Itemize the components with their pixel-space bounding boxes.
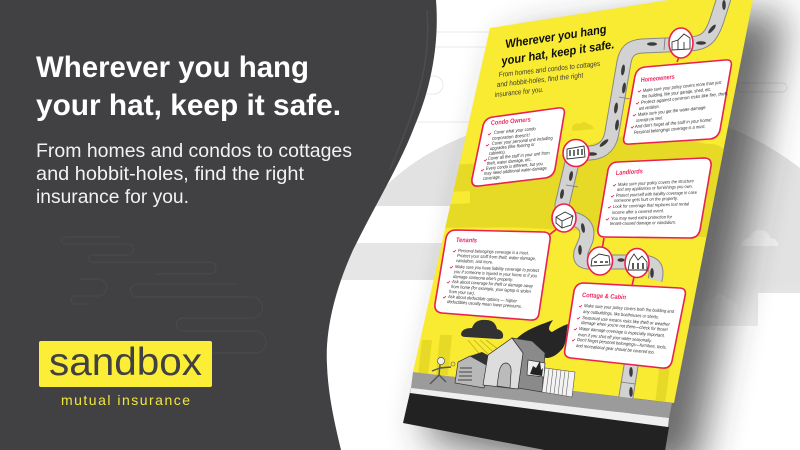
subheading: From homes and condos to cottages <box>36 140 352 162</box>
right pills <box>737 83 787 92</box>
panel: tenants: deductibles usually mean lower premiums. <box>447 299 522 309</box>
poster subtitle: From homes and condos to cottages <box>498 59 601 79</box>
panel: landlords <box>598 158 711 238</box>
panel: cottage and cabin: Seasonal use means risks like theft or weather <box>582 315 670 327</box>
panel: tenants: vandalism, and more. <box>456 258 493 265</box>
panel: tenants: Make sure you have liability coverage to protect <box>455 264 540 273</box>
scene: fire <box>514 320 568 358</box>
panel: homeowners: And don't forget all the stuff in your home! <box>634 117 712 129</box>
panel: tenants: Protect your stuff from theft, water damage, <box>457 253 536 261</box>
panel: tenants: Ask about deductible options — higher <box>447 294 518 303</box>
panel: landlords: You may need extra protection for <box>611 214 672 221</box>
panel: cottage and cabin <box>565 283 685 368</box>
subheading: and hobbit-holes, find the right <box>36 163 305 185</box>
subheading <box>36 140 352 208</box>
icon: homeowners house <box>669 28 693 58</box>
panel: homeowners: Personal belongings coverage is a must. <box>634 124 706 135</box>
panel: condo owners: may need additional water-damage <box>484 165 547 176</box>
poster subtitle: and hobbit-holes, find the right <box>496 70 585 89</box>
poster base <box>403 388 669 450</box>
panel: condo owners: coverage. <box>483 174 501 181</box>
scene: storm cloud <box>461 320 504 362</box>
panel: landlords: Landlords <box>616 168 643 177</box>
right cloud <box>742 230 778 246</box>
panel: landlords: someone gets hurt on the property. <box>614 196 678 203</box>
panel: cottage and cabin: Cottage & Cabin <box>582 292 626 301</box>
poster title <box>499 22 615 68</box>
poster title: Wherever you hang <box>504 22 608 51</box>
panel: tenants: Ask about coverage for theft or damage away <box>451 279 534 289</box>
panel: homeowners: and vandalism. <box>639 104 660 111</box>
connectors <box>549 57 679 286</box>
logo: sandbox mutual insurance: mutual insurance <box>61 392 190 408</box>
panel: cottage and cabin: Don't forget personal belongings—furniture, tools, <box>577 337 667 350</box>
panel: homeowners: the building, like your garage, shed, etc. <box>642 87 712 99</box>
panel: condo owners: cabinets). <box>489 149 506 156</box>
panel: tenants: from your car). <box>449 289 475 296</box>
icon: landlord houses <box>588 247 612 275</box>
poster drop shadow <box>425 14 785 450</box>
panel: homeowners: Make sure your policy covers more than just <box>643 80 722 93</box>
panel: tenants: Personal belongings coverage is a must. <box>458 248 529 255</box>
panel: homeowners: Homeowners <box>641 74 675 84</box>
poster title: your hat, keep it safe. <box>499 37 615 68</box>
panel: condo owners: Cover your personal unit including <box>492 135 553 146</box>
panel: condo owners <box>472 108 564 186</box>
panel: landlords: Look for coverage that replaces lost rental <box>613 201 690 209</box>
street <box>410 372 672 427</box>
panel: tenants <box>435 230 550 320</box>
panel: cottage and cabin: any outbuildings, like boathouses or sheds. <box>583 309 659 320</box>
panel: homeowners <box>624 60 731 144</box>
panel: homeowners: Protect against common risks like fire, theft, <box>641 91 729 105</box>
road <box>562 0 724 415</box>
panel: condo owners: Cover what your condo <box>494 126 536 135</box>
squiggle line decoration <box>62 237 266 353</box>
panel: cottage and cabin: Make sure your policy covers both the building and <box>584 303 674 314</box>
scene: running person <box>430 357 455 384</box>
panel: condo owners: corporation doesn't! <box>492 132 531 141</box>
panel: landlords: and any appliances or furnishings you own. <box>617 184 693 192</box>
panel: condo owners: Every condo is different, but you <box>486 161 543 171</box>
panel: homeowners: Make sure you get the water-damage <box>638 105 706 117</box>
icon: cottage cabin <box>625 248 649 278</box>
logo: sandbox mutual insurance: sandbox <box>49 341 203 384</box>
panel: tenants: damage someone else's property. <box>453 274 513 282</box>
panel: landlords: Make sure your policy covers the structure <box>618 178 694 187</box>
darker yellow background shapes <box>418 122 724 402</box>
panel: condo owners: Condo Owners <box>491 117 531 127</box>
panel: condo owners: theft, water damage, etc. <box>487 157 532 166</box>
panel: landlords: tenant-caused damage or vandalism. <box>610 220 676 226</box>
panel: cottage and cabin: Water damage coverage is especially important, <box>579 326 665 338</box>
poster subtitle: insurance for you. <box>494 85 544 99</box>
road cars <box>559 0 726 412</box>
right house <box>703 293 738 326</box>
panel: homeowners: coverage you need. <box>636 115 663 123</box>
panel: cottage and cabin: even if you shut off your water seasonally. <box>578 332 652 343</box>
heading: your hat, keep it safe. <box>36 89 341 122</box>
logo: sandbox mutual insurance <box>39 341 212 408</box>
panel: landlords: income after a covered event. <box>612 208 664 215</box>
panel: condo owners: upgrades (like flooring or <box>490 142 535 151</box>
panel: cottage and cabin: damage when you're not there—check for those! <box>581 320 669 332</box>
heading: Wherever you hang <box>36 51 309 84</box>
panel: cottage and cabin: and recreational gear should be covered too. <box>576 343 655 355</box>
dark panel <box>0 0 437 450</box>
panel: condo owners: Cover all the stuff in your unit from <box>488 150 550 161</box>
panel: landlords: Protect yourself with liability coverage in case <box>616 190 697 198</box>
icon: tenant moving box <box>552 204 576 232</box>
panel: tenants: from home (for example, your laptop is stolen <box>451 284 531 294</box>
heading <box>36 51 341 122</box>
panel: tenants: you if someone is injured in your home or if you <box>453 269 537 278</box>
scene: fence <box>542 368 575 397</box>
poster subtitle <box>494 59 601 99</box>
icon: condo building <box>563 140 589 166</box>
poster <box>403 0 760 450</box>
poster yellow page <box>413 0 753 403</box>
subheading: insurance for you. <box>36 186 189 208</box>
panel: tenants: Tenants <box>456 237 477 244</box>
scene: burning house <box>455 338 545 392</box>
